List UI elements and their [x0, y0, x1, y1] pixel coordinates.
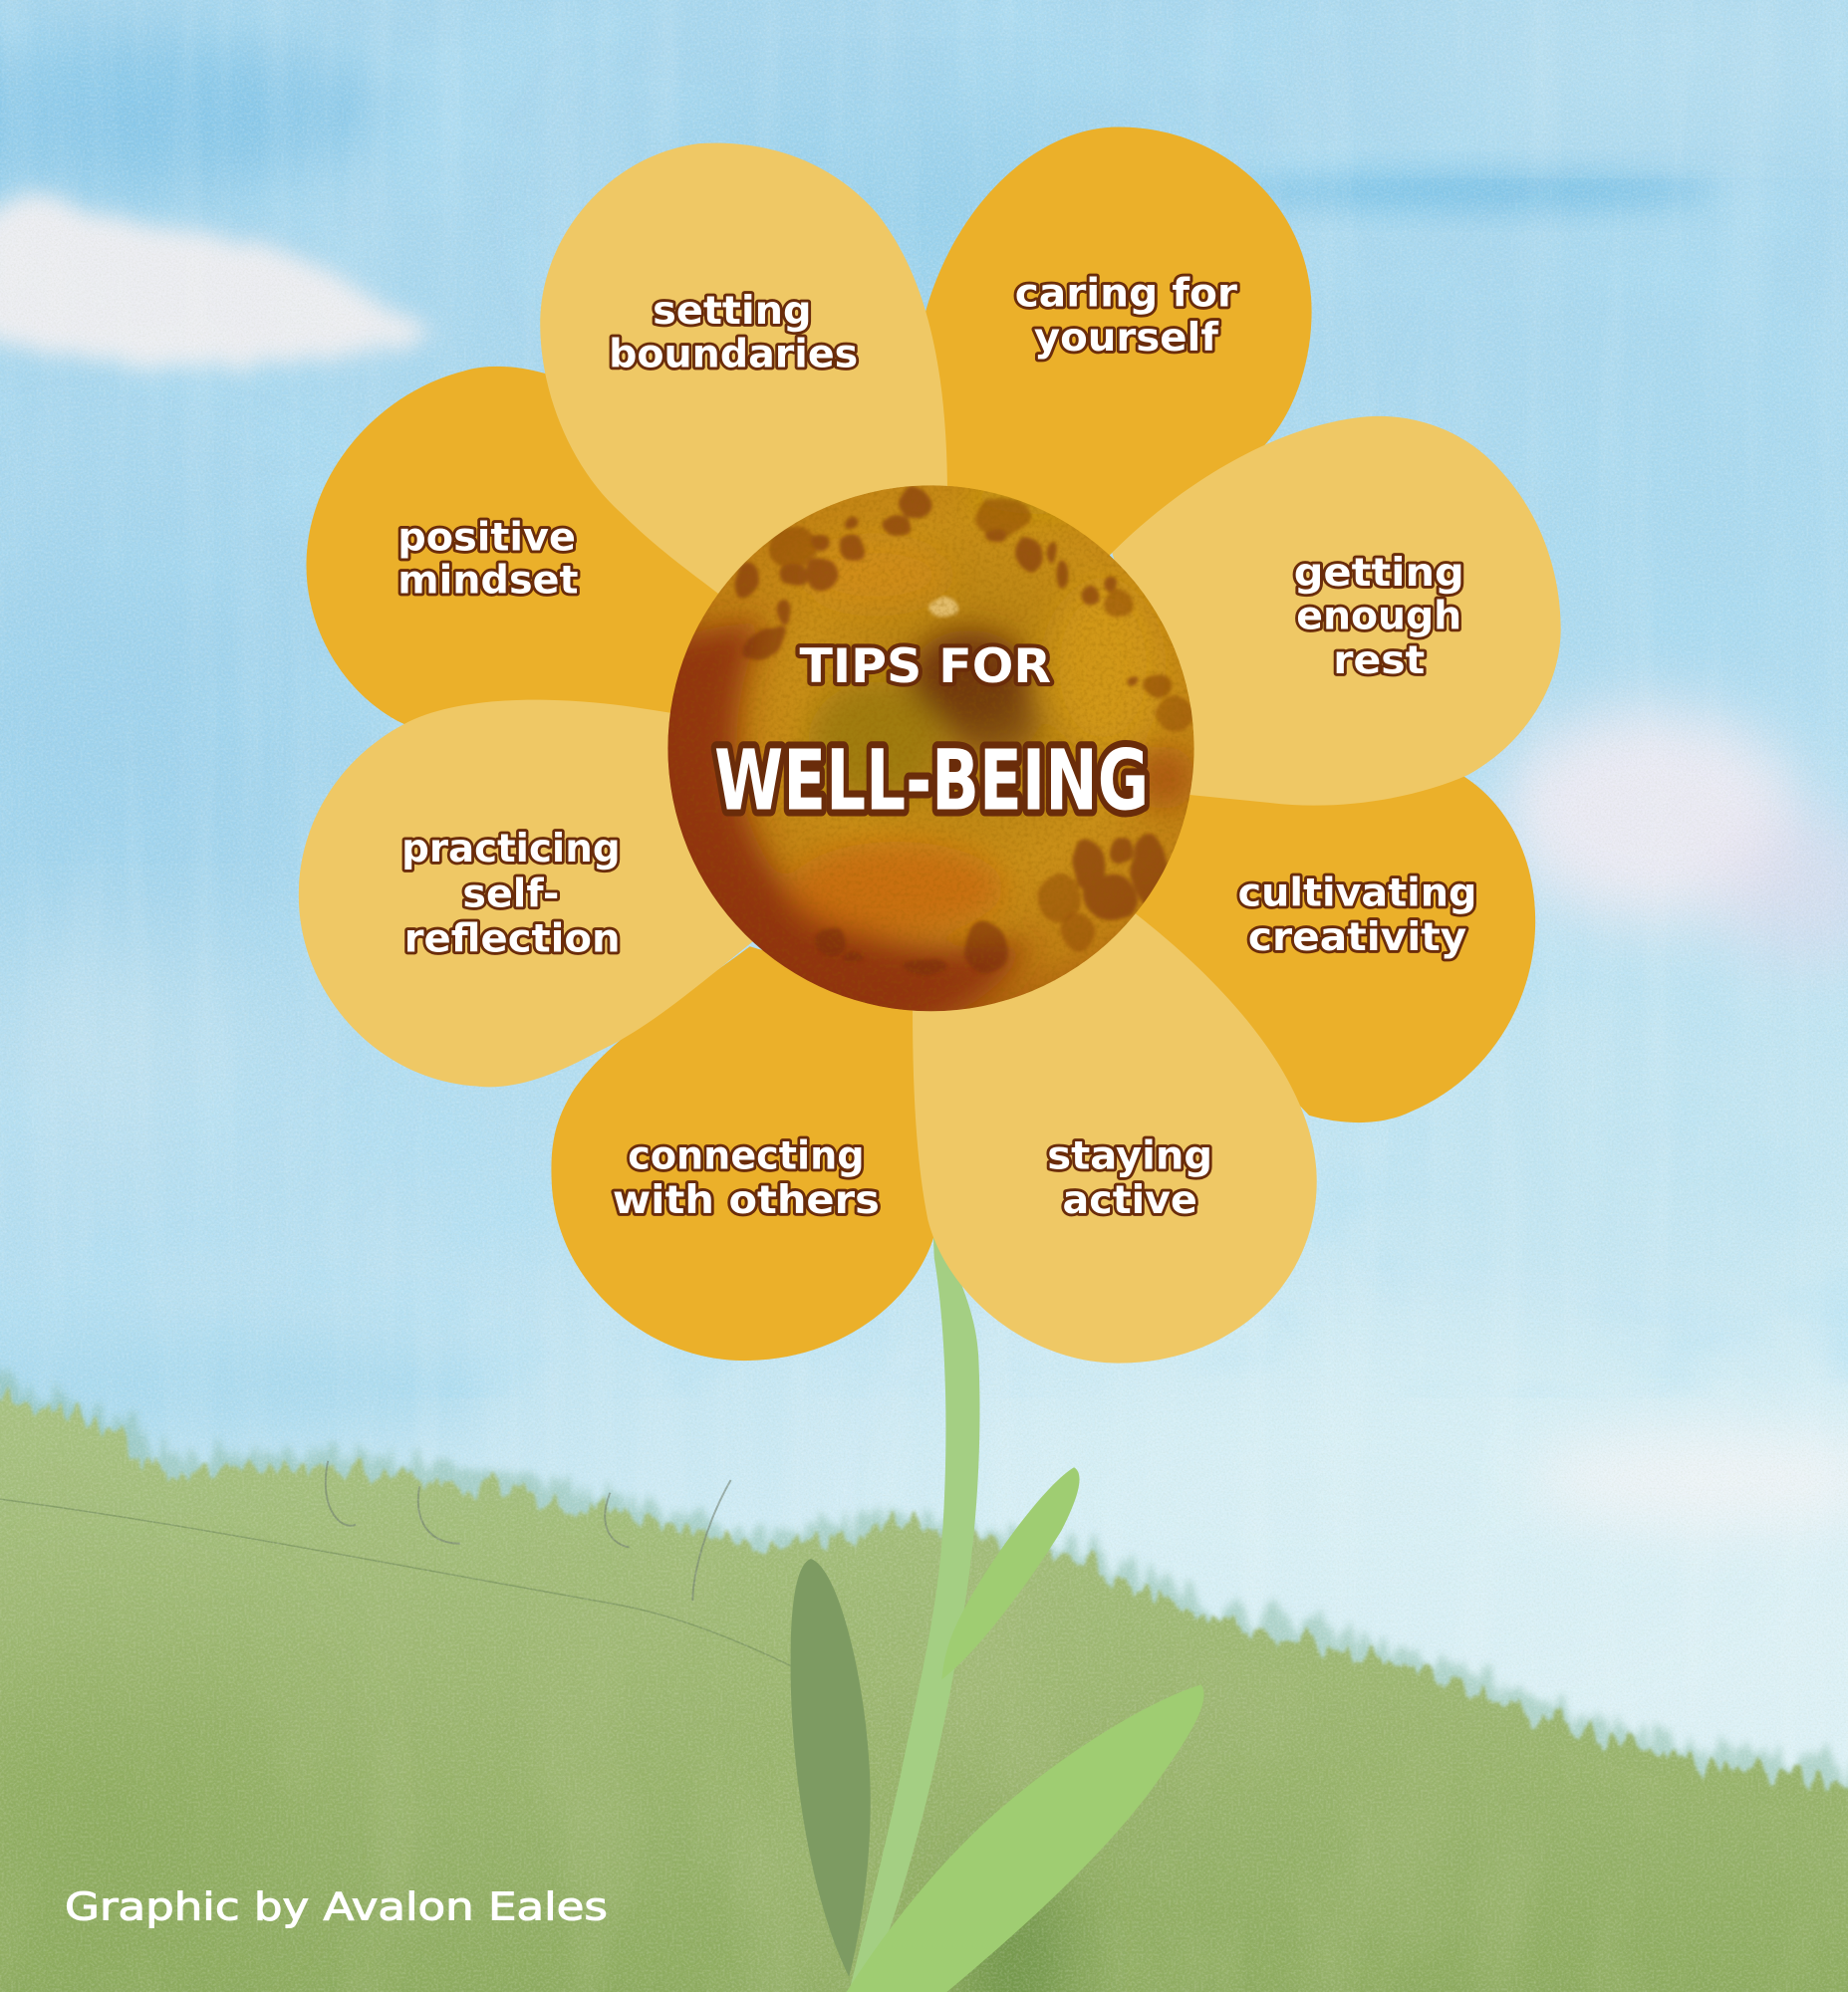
petal: practicing self-reflection: [299, 700, 762, 1087]
heading: tips for: TIPS FOR: [799, 639, 1051, 694]
petal: caring for yourself: [913, 127, 1312, 559]
blots: [734, 488, 1192, 974]
flower stem: [849, 1194, 979, 1992]
petal: connecting with others: connecting: [628, 1132, 865, 1178]
leaf: large right: [847, 1684, 1204, 1992]
petal: staying active: [913, 908, 1317, 1364]
petal: practicing self-reflection: reflection: [404, 915, 621, 961]
petal: cultivating creativity: cultivating: [1238, 870, 1476, 915]
petal: setting boundaries: setting: [653, 288, 812, 334]
leaf: dark left: [791, 1559, 871, 1977]
petal: practicing self-reflection: practicing: [401, 826, 621, 872]
center heading: [714, 639, 1149, 829]
petal: positive mindset: [306, 367, 731, 724]
clouds: [0, 190, 1848, 1531]
petal: positive mindset: positive: [397, 514, 576, 560]
highlight: [928, 597, 957, 617]
petal: caring for yourself: caring for: [1015, 270, 1237, 316]
petal: cultivating creativity: [1119, 775, 1535, 1122]
petal: positive mindset: mindset: [397, 558, 578, 604]
petal: practicing self-reflection: self-: [462, 872, 559, 917]
petal: connecting with others: with others: [613, 1177, 880, 1223]
credit line: Graphic by Avalon Eales: [65, 1884, 608, 1929]
petal: setting boundaries: [540, 143, 947, 604]
petal: getting enough rest: rest: [1333, 637, 1425, 683]
petal: connecting with others: [551, 946, 940, 1361]
petal: staying active: active: [1063, 1177, 1197, 1223]
petal: setting boundaries: boundaries: [609, 332, 858, 377]
petal: cultivating creativity: creativity: [1248, 914, 1466, 960]
background: grass hill: [0, 1370, 1848, 1992]
leaf: small right: [941, 1467, 1080, 1679]
flower center disc: [667, 485, 1194, 1012]
petal: getting enough rest: getting: [1294, 550, 1464, 596]
petal: staying active: staying: [1047, 1132, 1212, 1178]
petal: getting enough rest: enough: [1296, 593, 1461, 638]
heading: well-being: WELL-BEING: [714, 732, 1149, 829]
petal: caring for yourself: yourself: [1034, 315, 1219, 361]
petal: getting enough rest: [1112, 416, 1561, 806]
watercolor shading: [667, 490, 1193, 1012]
